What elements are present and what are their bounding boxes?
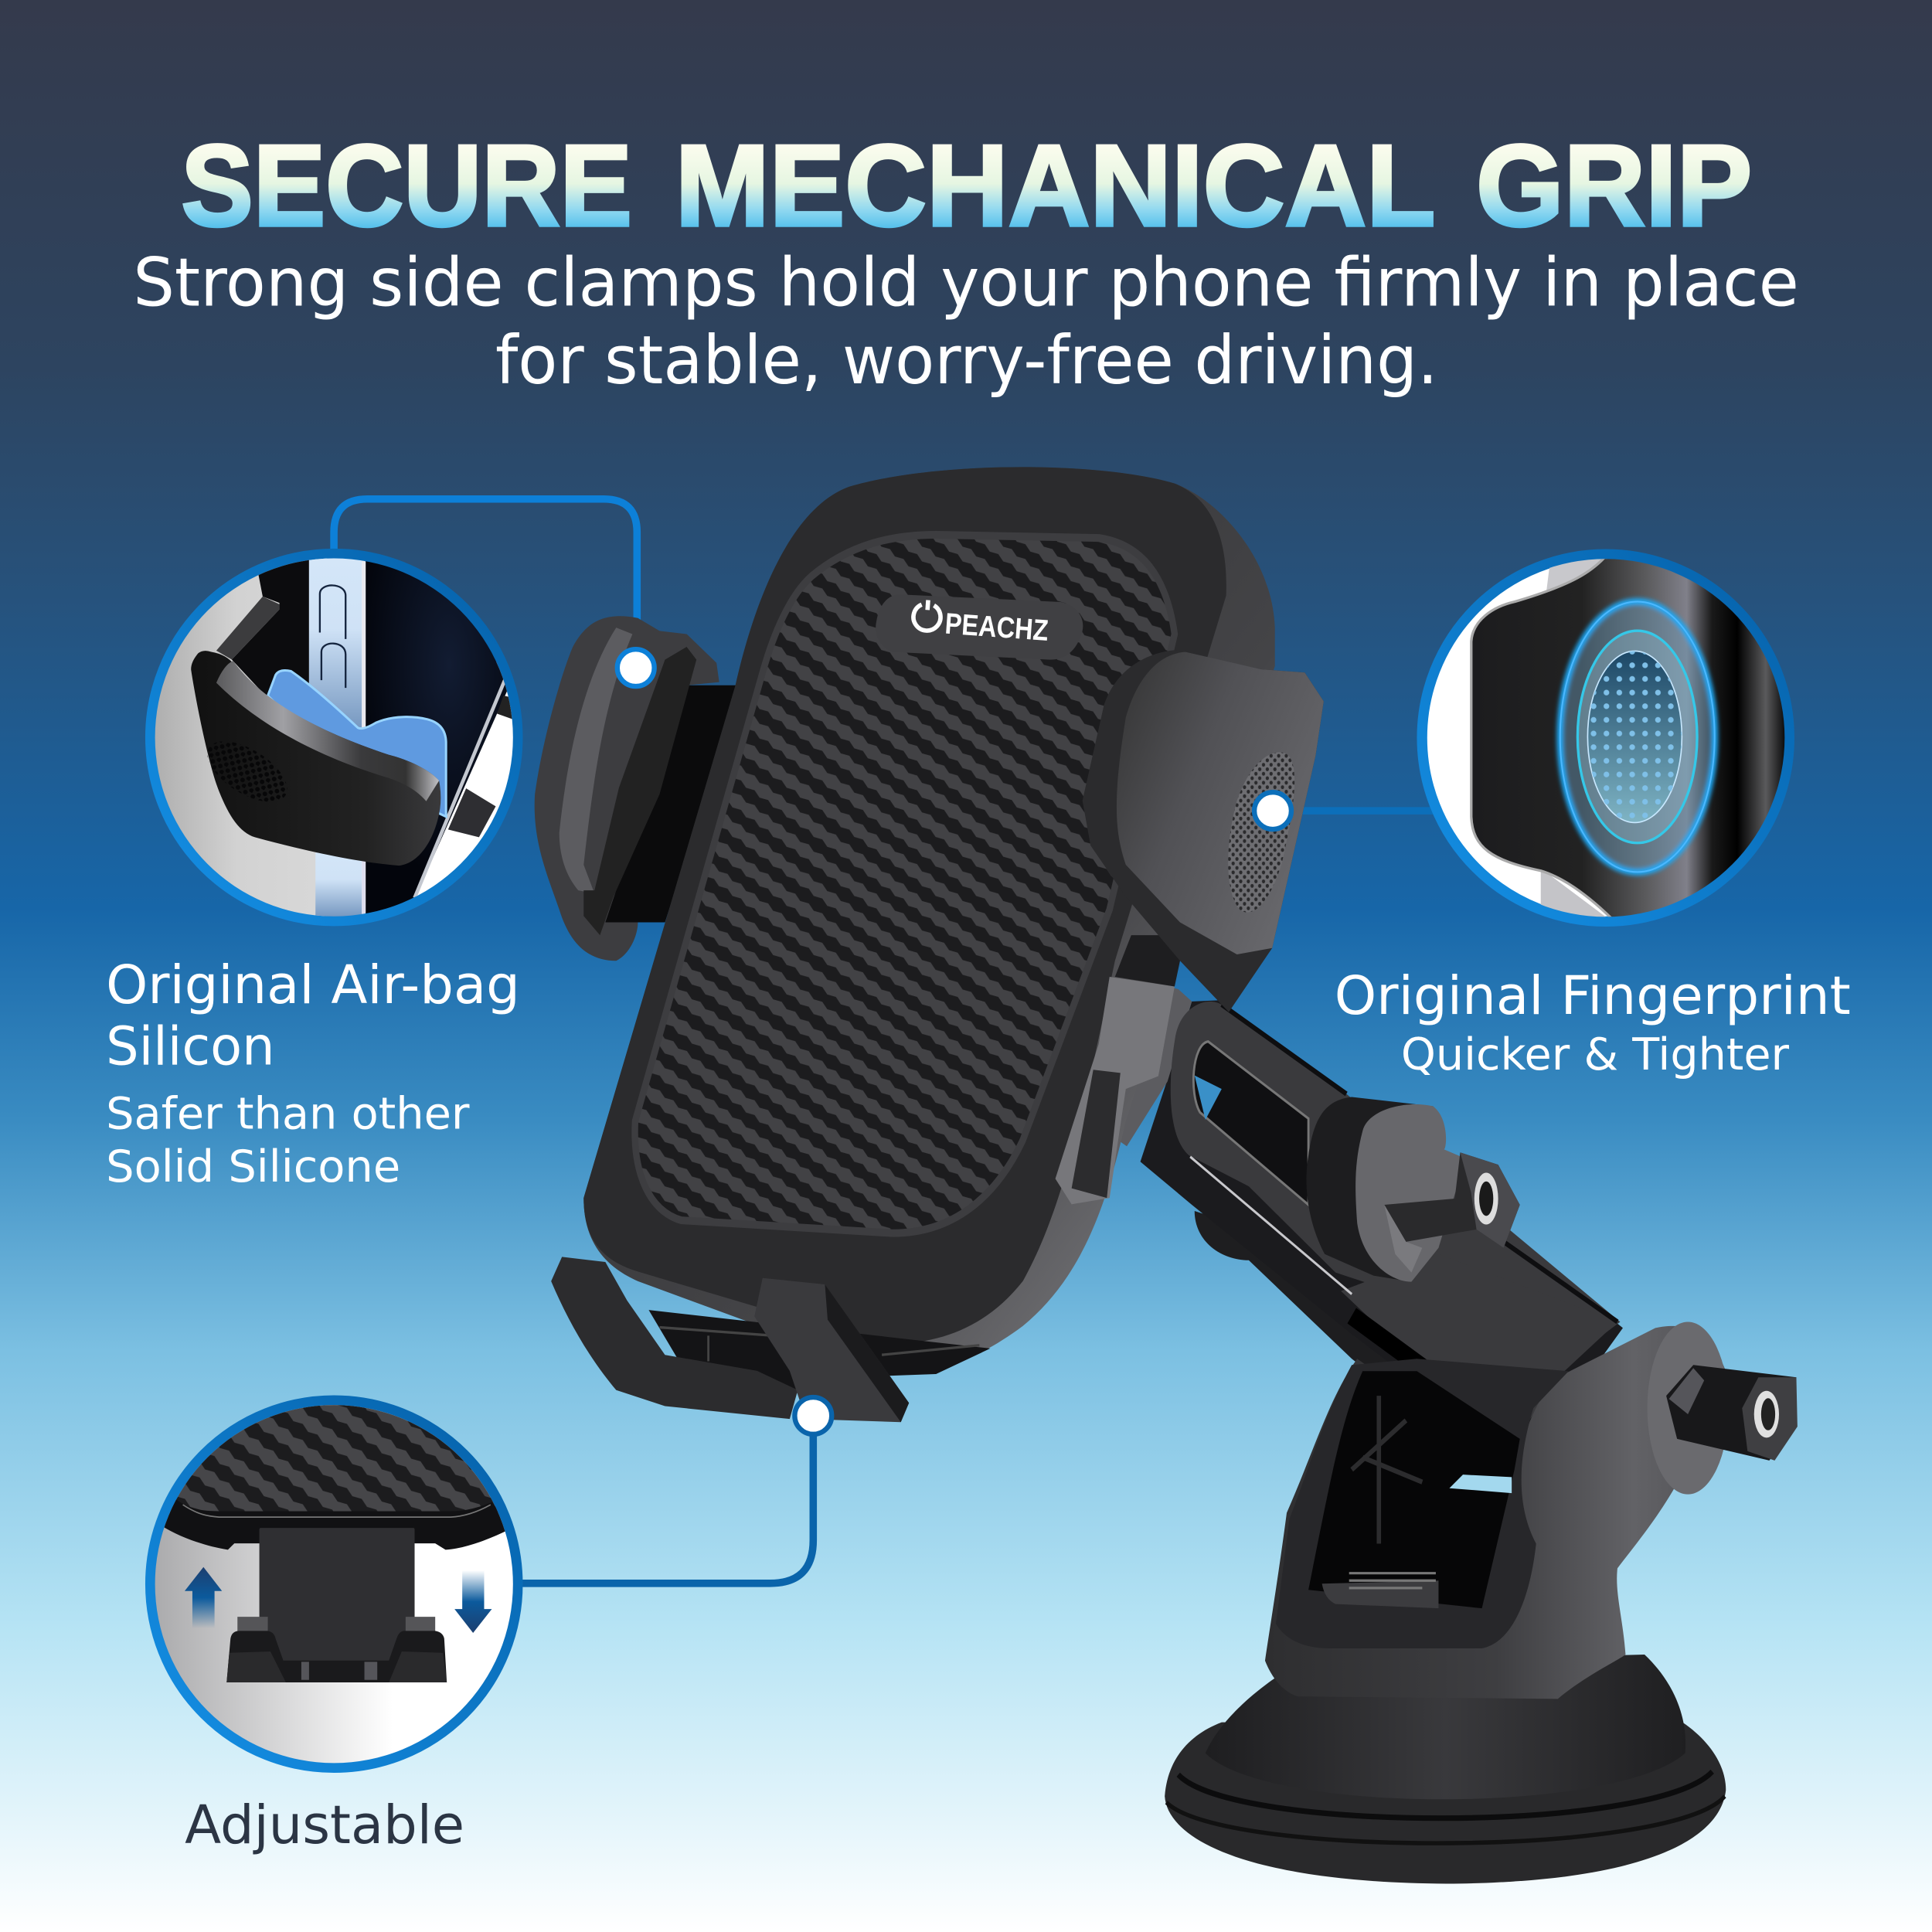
- arm slot: [1193, 1042, 1308, 1205]
- slider plate: [260, 1528, 415, 1665]
- product: phone holder: [535, 467, 1324, 1422]
- rear arm leg: [1195, 1211, 1493, 1470]
- right foot: [754, 1278, 909, 1422]
- base window rim: [1276, 1359, 1569, 1648]
- phone buttons: [320, 585, 345, 688]
- left foot: [551, 1257, 798, 1419]
- brand badge: [876, 594, 1083, 660]
- arrow down: [454, 1570, 492, 1633]
- label: original fingerprint: Quicker & Tighter: [1401, 1029, 1789, 1080]
- brand logo: [912, 599, 1049, 648]
- arm leather top: [1171, 1002, 1620, 1352]
- title: MECHANICAL: [675, 121, 1435, 250]
- connector: adjustable callout line: [518, 1417, 813, 1583]
- left clamp arm: [583, 685, 741, 923]
- right clamp grip dots: [1228, 752, 1294, 913]
- carbon pad: [170, 1405, 498, 1512]
- label: original air-bag silicon: Silicon: [106, 1016, 275, 1078]
- upper knob cylinder: [1306, 1097, 1444, 1282]
- label: adjustable: Adjustable: [185, 1794, 464, 1856]
- holder face: [583, 467, 1226, 1344]
- inset: fingerprint: [1422, 554, 1789, 922]
- side button: [448, 788, 495, 837]
- phone screen: [366, 556, 518, 917]
- left clamp: [535, 616, 719, 961]
- pad body: [1471, 554, 1788, 922]
- upper knob bolt: [1384, 1152, 1520, 1248]
- clip tab: [1322, 1580, 1438, 1608]
- subtitle: for stable, worry-free driving.: [495, 322, 1438, 400]
- connector: air-bag callout line: [334, 499, 637, 665]
- arm link: [1141, 1000, 1623, 1458]
- subtitle: Strong side clamps hold your phone firmly in place: [133, 244, 1799, 321]
- label: original air-bag silicon: Solid Silicone: [106, 1141, 400, 1192]
- fingerprint sensor: [1587, 651, 1682, 822]
- chrome edges: [1546, 559, 1607, 590]
- glow rings: [1560, 602, 1715, 872]
- undercarriage: [648, 1310, 990, 1393]
- clamp perforation: [207, 742, 287, 802]
- brand name: PEACHZ: [944, 607, 1049, 648]
- foot pegs: [237, 1617, 435, 1632]
- product: arm and suction base: [1070, 971, 1798, 1884]
- suction cup plate: [1165, 1723, 1726, 1884]
- inset: air-bag silicon: [147, 549, 530, 930]
- label: original air-bag silicon: Original Air-bag: [106, 954, 520, 1016]
- window slit showing background: [1449, 1475, 1512, 1493]
- label: original air-bag silicon: Safer than other: [106, 1087, 470, 1139]
- foot base: [226, 1651, 447, 1682]
- callout dot: fingerprint: [1254, 792, 1291, 829]
- base shoulder body: [1265, 1326, 1726, 1699]
- inset: adjustable: [147, 1399, 526, 1773]
- carbon fibre panel: [635, 535, 1175, 1233]
- clamp: [191, 651, 440, 866]
- base window: [1308, 1371, 1520, 1608]
- callout dot: air-bag: [617, 649, 655, 686]
- air-bag pad: [268, 671, 446, 817]
- label: original fingerprint: Original Fingerprint: [1335, 965, 1851, 1027]
- phone edge: [415, 680, 505, 898]
- power icon: [913, 599, 942, 631]
- phone frame: [309, 556, 362, 736]
- label: original fingerprint: [1335, 965, 1851, 1080]
- hinge: [1070, 971, 1192, 1146]
- label: original air-bag silicon: [106, 954, 520, 1192]
- connector: fingerprint callout line: [1273, 808, 1435, 813]
- holder body rim: [583, 467, 1275, 1372]
- lower knob: [1648, 1321, 1798, 1495]
- side button and hinge: [1056, 977, 1175, 1204]
- subtitle: [133, 244, 1799, 400]
- title: GRIP: [1476, 121, 1752, 250]
- arrow up: [185, 1567, 222, 1628]
- suction cup dome: [1206, 1655, 1685, 1799]
- title: [181, 121, 1752, 250]
- callout dot: adjustable: [794, 1397, 832, 1434]
- right clamp: [1083, 650, 1324, 1012]
- title: SECURE: [181, 121, 632, 250]
- holder frame: [157, 1499, 512, 1549]
- phone back: [232, 560, 309, 696]
